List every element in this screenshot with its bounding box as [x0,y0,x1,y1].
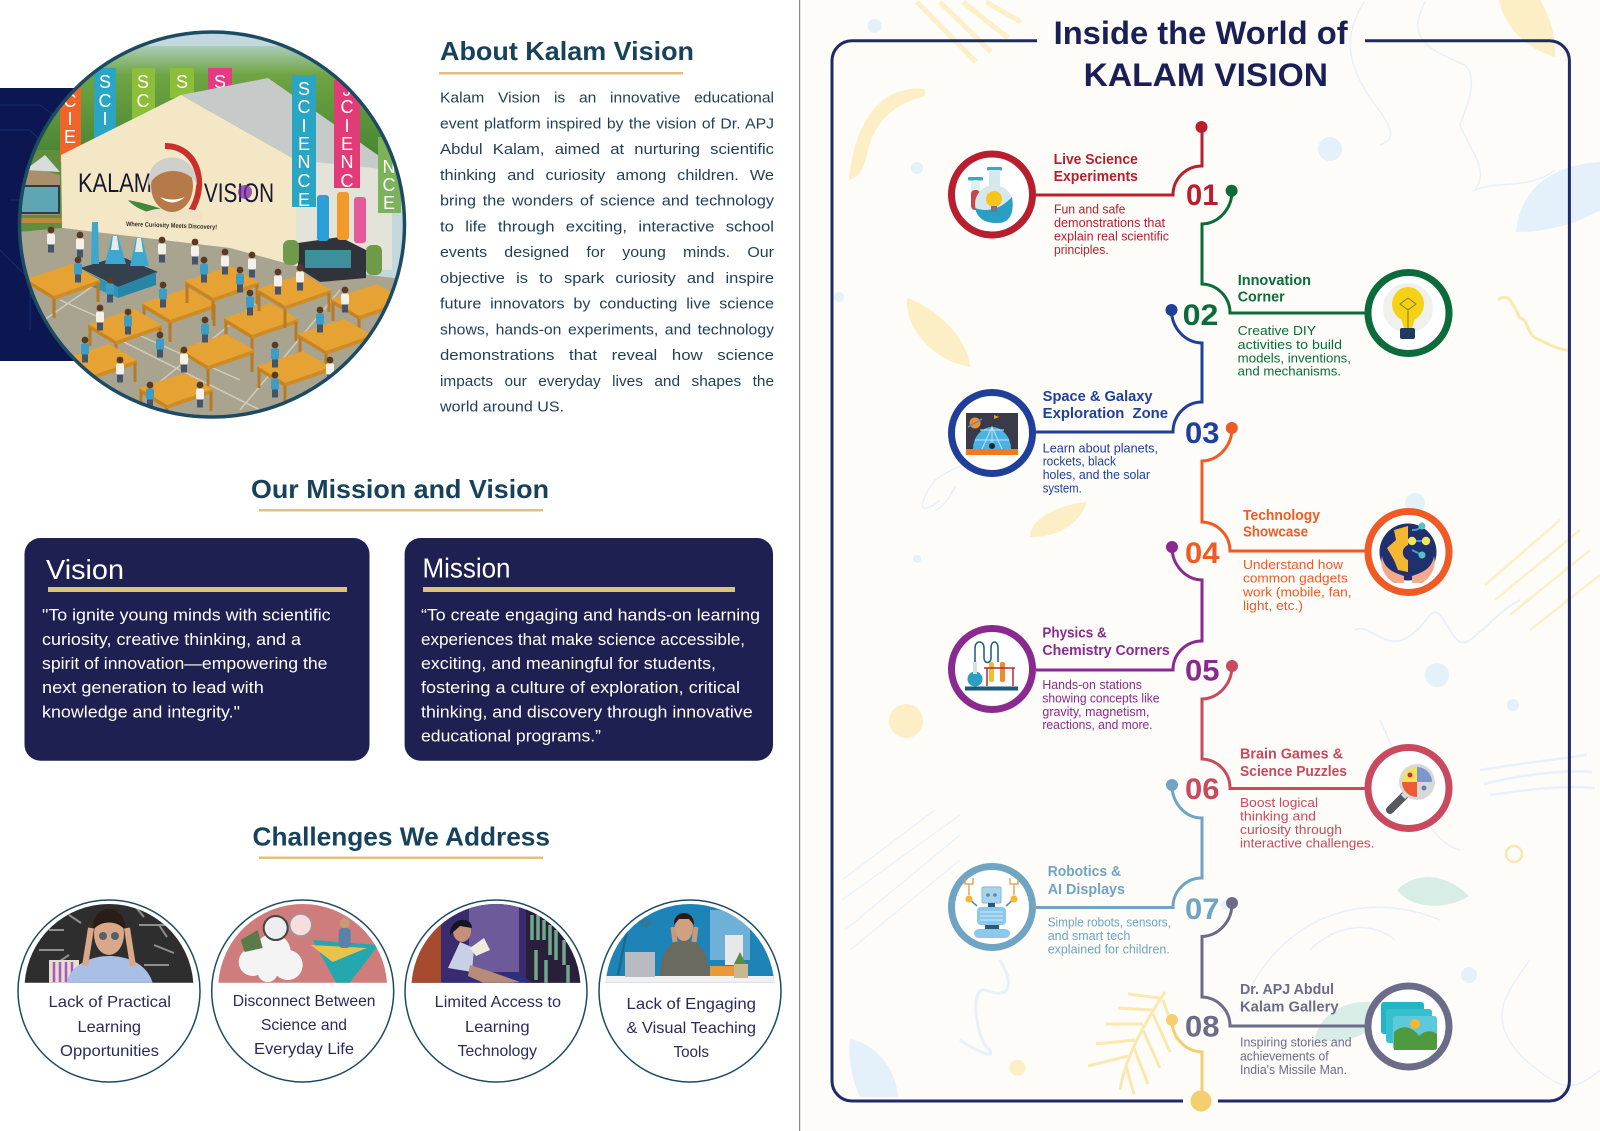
item 01: Live Science Experiments: Live Science [1054,152,1138,168]
item 01: Live Science Experiments: explain real scientific [1054,230,1169,244]
decorative background shapes [834,0,1600,1097]
item 08: Dr. APJ Abdul Kalam Gallery: Kalam Gallery [1240,1000,1339,1016]
title [1054,15,1348,93]
text block: about paragraph [439,90,775,416]
item 02: Innovation Corner: models, inventions, [1238,352,1351,366]
item 05: Physics & Chemistry Corners: Hands-on stations [1042,678,1142,692]
card: Disconnect Between Science and Everyday Life: Science and [261,1017,347,1034]
item 06: Brain Games & Science Puzzles: Science Puzzles [1240,764,1347,780]
illustration: Kalam Vision science fair: I [344,116,350,136]
panel: Vision: Vision [46,554,124,585]
card: Lack of Practical Learning Opportunities: Lack of Practical [48,994,171,1011]
card: Disconnect Between Science and Everyday Life: Disconnect Between [233,993,376,1010]
item 03: Space & Galaxy Exploration Zone: Learn about planets, [1043,441,1158,455]
icon: planetarium dome [966,413,1018,455]
illustration: Kalam Vision science fair: C [136,91,150,111]
text block: about paragraph: Kalam Vision is an innovative educational [440,90,774,107]
timeline end marker [1166,1014,1212,1112]
panel: Vision: spirit of innovation—empowering the [42,655,328,673]
item 07: Robotics & AI Displays: Simple robots, sensors, [1048,916,1171,930]
icon: light bulb [1383,283,1433,339]
item 02: Innovation Corner: 02 [1183,299,1218,332]
text block: about paragraph: objective is to spark curiosity and inspire [440,270,774,287]
item 02: Innovation Corner [1183,185,1449,379]
item 07: Robotics & AI Displays [952,779,1220,956]
illustration: Kalam Vision science fair: S [176,72,188,92]
item 04: Technology Showcase: common gadgets [1243,572,1348,586]
tables and children [26,264,100,318]
item 06: Brain Games & Science Puzzles: curiosity through [1240,823,1342,837]
panel: Mission: fostering a culture of exploration, critical [421,679,740,697]
item 04: Technology Showcase: Showcase [1243,525,1308,541]
text block: about paragraph: thinking and curiosity among children. We [440,167,774,184]
item 07: Robotics & AI Displays: and smart tech [1048,929,1130,943]
item 06: Brain Games & Science Puzzles: thinking and [1240,810,1316,824]
illustration: Kalam Vision science fair: N [340,152,354,172]
item 07: Robotics & AI Displays: explained for children. [1048,942,1170,956]
illustration: Kalam Vision science fair: S [99,72,111,92]
panel: Vision: "To ignite young minds with scientific [42,607,331,625]
item 01: Live Science Experiments: Fun and safe [1054,202,1126,216]
illustration: Kalam Vision science fair: C [64,91,76,111]
item 04: Technology Showcase: Understand how [1243,558,1344,572]
item 07: Robotics & AI Displays: Robotics & [1048,864,1122,880]
card: Disconnect Between Science and Everyday Life: Everyday Life [254,1041,354,1058]
illustration: Kalam Vision science fair: S [214,72,226,92]
logo wordmark left: KALAM [78,168,152,198]
item 07: Robotics & AI Displays: 07 [1185,893,1220,926]
panel: Mission [405,538,773,761]
central demo table [80,256,158,287]
item 06: Brain Games & Science Puzzles: 06 [1185,773,1220,806]
card: Lack of Engaging and Visual Teaching Tools: Tools [674,1044,709,1061]
test tubes and stage [298,237,366,282]
panel: Mission: experiences that make science accessible, [421,631,745,649]
icon: globe with gear in hands [1380,522,1436,583]
illustration: Kalam Vision science fair: I [67,109,73,129]
illustration: Kalam Vision science fair: C [298,97,310,117]
item 05: Physics & Chemistry Corners: gravity, magnetism, [1042,705,1150,719]
item 04: Technology Showcase [1185,422,1449,613]
illustration: Kalam Vision science fair: E [383,193,395,213]
panel: Mission: Mission [422,553,510,584]
illustration: Kalam Vision science fair: C [98,91,112,111]
item 03: Space & Galaxy Exploration Zone: 03 [1185,417,1220,450]
item 04: Technology Showcase: Technology [1243,508,1320,524]
illustration: Kalam Vision science fair: I [102,109,108,129]
card: Lack of Practical Learning Opportunities: Opportunities [60,1043,159,1060]
card: Limited Access to Learning Technology [405,900,587,1082]
item 01: Live Science Experiments: 01 [1186,179,1218,212]
icon: robot [965,878,1018,938]
card: Lack of Engaging and Visual Teaching Tools: & Visual Teaching [626,1020,756,1037]
text block: about paragraph: shows, hands-on experiments, and technology [440,321,775,338]
panel: Vision: next generation to lead with [42,679,264,697]
item 03: Space & Galaxy Exploration Zone: system. [1043,482,1082,496]
illustration: Kalam Vision science fair: S [298,79,310,99]
icon: photo gallery [1381,1002,1437,1050]
item 07: Robotics & AI Displays: AI Displays [1048,882,1125,898]
item 08: Dr. APJ Abdul Kalam Gallery: Inspiring stories and [1240,1036,1352,1050]
heading: About Kalam Vision: About Kalam Vision [440,36,694,66]
palm frond [1088,992,1177,1094]
illustration: Kalam Vision science fair: J [342,80,352,100]
item 02: Innovation Corner: activities to build [1238,338,1342,352]
item 05: Physics & Chemistry Corners: reactions, and more. [1042,718,1153,732]
item 02: Innovation Corner: and mechanisms. [1238,365,1341,379]
text block: about paragraph: to life through exciting, interactive school [440,218,774,235]
item 06: Brain Games & Science Puzzles: Boost logical [1240,796,1318,810]
illustration: Kalam Vision science fair: N [298,152,310,172]
frame [832,41,1569,1101]
title: KALAM VISION [1084,57,1328,93]
text block: about paragraph: demonstrations that reveal how science [440,347,774,364]
panel: Vision [24,538,370,761]
item 04: Technology Showcase: 04 [1185,537,1220,570]
item 01: Live Science Experiments: principles. [1054,243,1109,257]
item 03: Space & Galaxy Exploration Zone: rockets, black [1043,455,1117,469]
item 05: Physics & Chemistry Corners: 05 [1185,655,1220,688]
illustration: Kalam Vision science fair: Where Curiosity Meets Discovery! [126,221,217,231]
illustration: Kalam Vision science fair: E [341,134,353,154]
panel: Mission: thinking, and discovery through innovative [421,704,753,722]
illustration: Kalam Vision science fair: C [340,97,354,117]
item 08: Dr. APJ Abdul Kalam Gallery: 08 [1185,1011,1220,1044]
panel: right page background [800,0,1600,1131]
illustration: Kalam Vision science fair [18,30,410,430]
illustration: Kalam Vision science fair: I [301,116,307,136]
item 03: Space & Galaxy Exploration Zone: Space & Galaxy [1043,389,1153,405]
illustration: Kalam Vision science fair: VISION [204,178,274,208]
text block: about paragraph: impacts our everyday lives and shapes the [440,373,774,390]
text block: about paragraph: bring the wonders of science and technology [440,193,775,210]
item 08: Dr. APJ Abdul Kalam Gallery [1185,897,1449,1077]
item 02: Innovation Corner: Innovation [1238,273,1311,289]
illustration: Kalam Vision science fair: C [298,171,310,191]
icon: puzzle magnifier [1390,764,1435,810]
illustration: Kalam Vision science fair: C [340,171,354,191]
illustration: Kalam Vision science fair: E [298,134,310,154]
card: Limited Access to Learning Technology: Learning [465,1019,530,1036]
item 05: Physics & Chemistry Corners [952,541,1220,732]
panel: Mission: “To create engaging and hands-on learning [421,607,760,625]
text block: about paragraph: world around US. [439,399,564,416]
item 02: Innovation Corner: Creative DIY [1238,324,1317,338]
item 04: Technology Showcase: light, etc.) [1243,599,1303,613]
item 03: Space & Galaxy Exploration Zone: holes, and the solar [1043,468,1150,482]
item 05: Physics & Chemistry Corners: showing concepts like [1042,691,1160,705]
icon: flask and bulb [968,167,1013,223]
item 03: Space & Galaxy Exploration Zone [952,304,1220,496]
panel: Mission: educational programs.” [421,728,601,746]
item 05: Physics & Chemistry Corners: Chemistry Corners [1042,643,1170,659]
illustration: Kalam Vision science fair: E [298,190,310,210]
item 08: Dr. APJ Abdul Kalam Gallery: achievements of [1240,1050,1329,1064]
illustration: Kalam Vision science fair: C [382,175,396,195]
item 02: Innovation Corner: Corner [1238,290,1285,306]
card: Lack of Engaging and Visual Teaching Tools [599,900,781,1082]
illustration: Kalam Vision science fair: E [64,127,76,147]
item 06: Brain Games & Science Puzzles [1185,660,1449,850]
text block: about paragraph: Abdul Kalam, aimed at nurturing scientific [440,141,775,158]
panel: left page accent block [0,88,120,361]
text block: about paragraph: future innovators by conducting live science [440,296,774,313]
icon: chemistry set [965,642,1018,690]
panel: Vision: knowledge and integrity." [42,704,240,722]
item 01: Live Science Experiments: Experiments [1054,169,1138,185]
card: Disconnect Between Science and Everyday Life [212,900,394,1082]
text block: about paragraph: events designed for young minds. Our [440,244,774,261]
item 05: Physics & Chemistry Corners: Physics & [1042,626,1107,642]
card: Lack of Practical Learning Opportunities: Learning [78,1019,141,1036]
item 01: Live Science Experiments [952,121,1218,257]
panel: Mission: exciting, and meaningful for students, [421,655,716,673]
panel: Vision: curiosity, creative thinking, and a [42,631,302,649]
card: Lack of Engaging and Visual Teaching Tools: Lack of Engaging [626,996,756,1013]
card: Lack of Practical Learning Opportunities [18,900,200,1082]
illustration: Kalam Vision science fair: N [382,157,396,177]
text block: about paragraph: event platform inspired by the vision of Dr. APJ [440,115,774,132]
item 06: Brain Games & Science Puzzles: interactive challenges. [1240,836,1374,850]
illustration: Kalam Vision science fair: S [137,72,149,92]
item 08: Dr. APJ Abdul Kalam Gallery: Dr. APJ Abdul [1240,982,1334,998]
item 08: Dr. APJ Abdul Kalam Gallery: India's Missile Man. [1240,1063,1347,1077]
heading: Challenges We Address: Challenges We Address [252,822,550,852]
card: Limited Access to Learning Technology: Limited Access to [435,994,561,1011]
heading: Our Mission and Vision: Our Mission and Vision [251,474,549,504]
item 06: Brain Games & Science Puzzles: Brain Games & [1240,746,1344,762]
item 01: Live Science Experiments: demonstrations that [1054,216,1166,230]
card: Limited Access to Learning Technology: Technology [458,1043,537,1060]
item 03: Space & Galaxy Exploration Zone: Exploration Zone [1043,406,1168,422]
title: Inside the World of [1054,15,1348,51]
item 04: Technology Showcase: work (mobile, fan, [1242,586,1352,600]
